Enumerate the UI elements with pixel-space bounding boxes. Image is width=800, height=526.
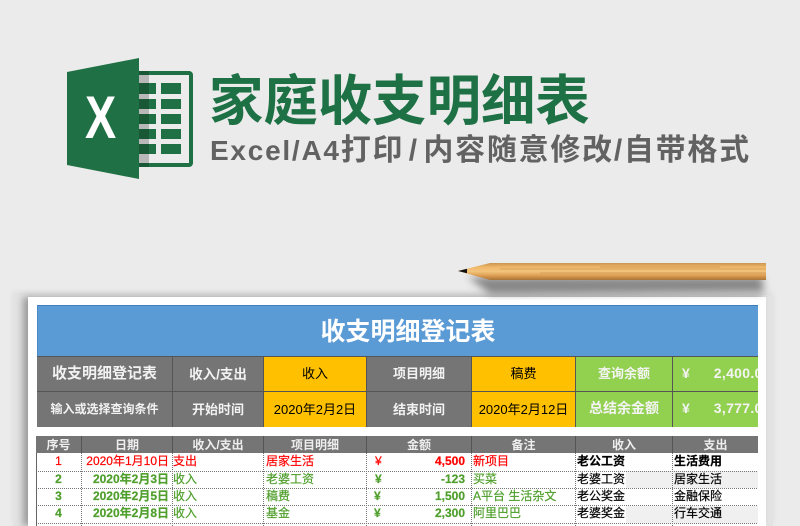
- row 4: 基金: [266, 506, 290, 520]
- row 2: -123: [441, 472, 465, 486]
- field: end date: [472, 392, 575, 427]
- table header row: [36, 436, 758, 453]
- value: query balance: [673, 357, 758, 391]
- field: start date: 2020年2月2日: [274, 402, 356, 416]
- table: records: [36, 436, 758, 526]
- row 1: 2020年1月10日: [86, 454, 169, 468]
- table header row: 金额: [407, 438, 431, 452]
- table header row: 日期: [115, 438, 139, 452]
- row 1: 新项目: [473, 454, 509, 468]
- label: form name: 收支明细登记表: [52, 365, 157, 382]
- icon: Excel logo: X: [85, 84, 116, 151]
- table header row: 收入/支出: [192, 438, 244, 452]
- row 1: 4,500: [435, 454, 465, 468]
- panel: query form: [37, 356, 758, 427]
- label: income or expense: 收入/支出: [189, 366, 247, 382]
- icon: Excel logo: [67, 58, 193, 179]
- row 3: ¥: [374, 489, 381, 503]
- icon: pencil: [458, 263, 768, 300]
- row 3: 金融保险: [674, 489, 722, 503]
- subtitle: Excel/A4打印/内容随意修改/自带格式: [210, 134, 751, 167]
- row 3: 老公奖金: [577, 489, 625, 503]
- table header row: 序号: [46, 438, 70, 452]
- label: start time: [173, 392, 263, 427]
- row 2: 买菜: [473, 472, 497, 486]
- row 1: 老公工资: [577, 454, 625, 468]
- row 4: 阿里巴巴: [473, 506, 521, 520]
- row 4: 4: [55, 506, 62, 520]
- field: income or expense value: 收入: [302, 366, 328, 381]
- panel: back sheet: [13, 295, 773, 526]
- row 1: 1: [55, 454, 62, 468]
- table header row: 备注: [511, 438, 536, 452]
- row 3: [55, 489, 722, 503]
- value: total balance: [673, 392, 758, 427]
- row 2: [55, 472, 722, 486]
- table header row: 收入: [612, 438, 636, 452]
- panel: spreadsheet title band: [37, 305, 758, 356]
- row 1: 生活费用: [674, 454, 722, 468]
- label: form name: [37, 357, 172, 391]
- row 1: 支出: [173, 454, 197, 468]
- panel: spreadsheet title band: 收支明细登记表: [320, 318, 496, 346]
- row 4: [55, 506, 722, 520]
- table header row: 项目明细: [291, 438, 339, 452]
- row 1: [55, 454, 722, 468]
- label: start time: 开始时间: [192, 402, 244, 416]
- row 1: ¥: [375, 454, 382, 468]
- row 3: 1,500: [435, 489, 465, 503]
- row 2: 居家生活: [674, 472, 722, 486]
- value: query balance: ¥: [682, 364, 690, 380]
- label: query balance: 查询余额: [598, 366, 650, 381]
- label: total balance: 总结余金额: [589, 400, 659, 416]
- label: total balance: [576, 392, 672, 427]
- row 4: 老婆奖金: [577, 506, 625, 520]
- row 2: 老婆工资: [577, 472, 625, 486]
- label: item detail: 项目明细: [393, 366, 445, 381]
- row 4: 2020年2月8日: [93, 506, 169, 520]
- label: end time: [367, 392, 471, 427]
- row 2: ¥: [375, 472, 382, 486]
- row 4: 行车交通: [674, 506, 722, 520]
- table header row: 支出: [703, 438, 728, 452]
- value: total balance: ¥: [682, 400, 690, 416]
- table grid lines: [36, 453, 757, 526]
- row 2: 老婆工资: [266, 472, 314, 486]
- row 4: 2,300: [435, 506, 465, 520]
- row 2: 2: [55, 472, 62, 486]
- row 3: 2020年2月5日: [93, 489, 169, 503]
- field: income or expense value: [264, 357, 366, 391]
- label: query condition: 输入或选择查询条件: [50, 402, 158, 416]
- row 4: ¥: [374, 506, 381, 520]
- label: query condition: [37, 392, 172, 427]
- field: start date: [264, 392, 366, 427]
- row 3: 收入: [173, 489, 197, 503]
- field: item value: 稿费: [510, 366, 536, 381]
- field: item value: [472, 357, 575, 391]
- field: end date: 2020年2月12日: [479, 402, 568, 416]
- panel: paper sheet: [28, 297, 766, 526]
- row 4: 收入: [173, 506, 197, 520]
- row 3: 3: [55, 489, 62, 503]
- shaded category cells: [576, 471, 758, 523]
- label: query balance: [576, 357, 672, 391]
- title: 家庭收支明细表: [209, 71, 590, 132]
- label: item detail: [367, 357, 471, 391]
- row 2: 收入: [173, 472, 197, 486]
- row 1: 居家生活: [266, 454, 314, 468]
- row 3: A平台 生活杂文: [473, 489, 556, 503]
- row 3: 稿费: [266, 489, 290, 503]
- label: end time: 结束时间: [393, 402, 445, 416]
- row 2: 2020年2月3日: [93, 472, 169, 486]
- label: income or expense: [173, 357, 263, 391]
